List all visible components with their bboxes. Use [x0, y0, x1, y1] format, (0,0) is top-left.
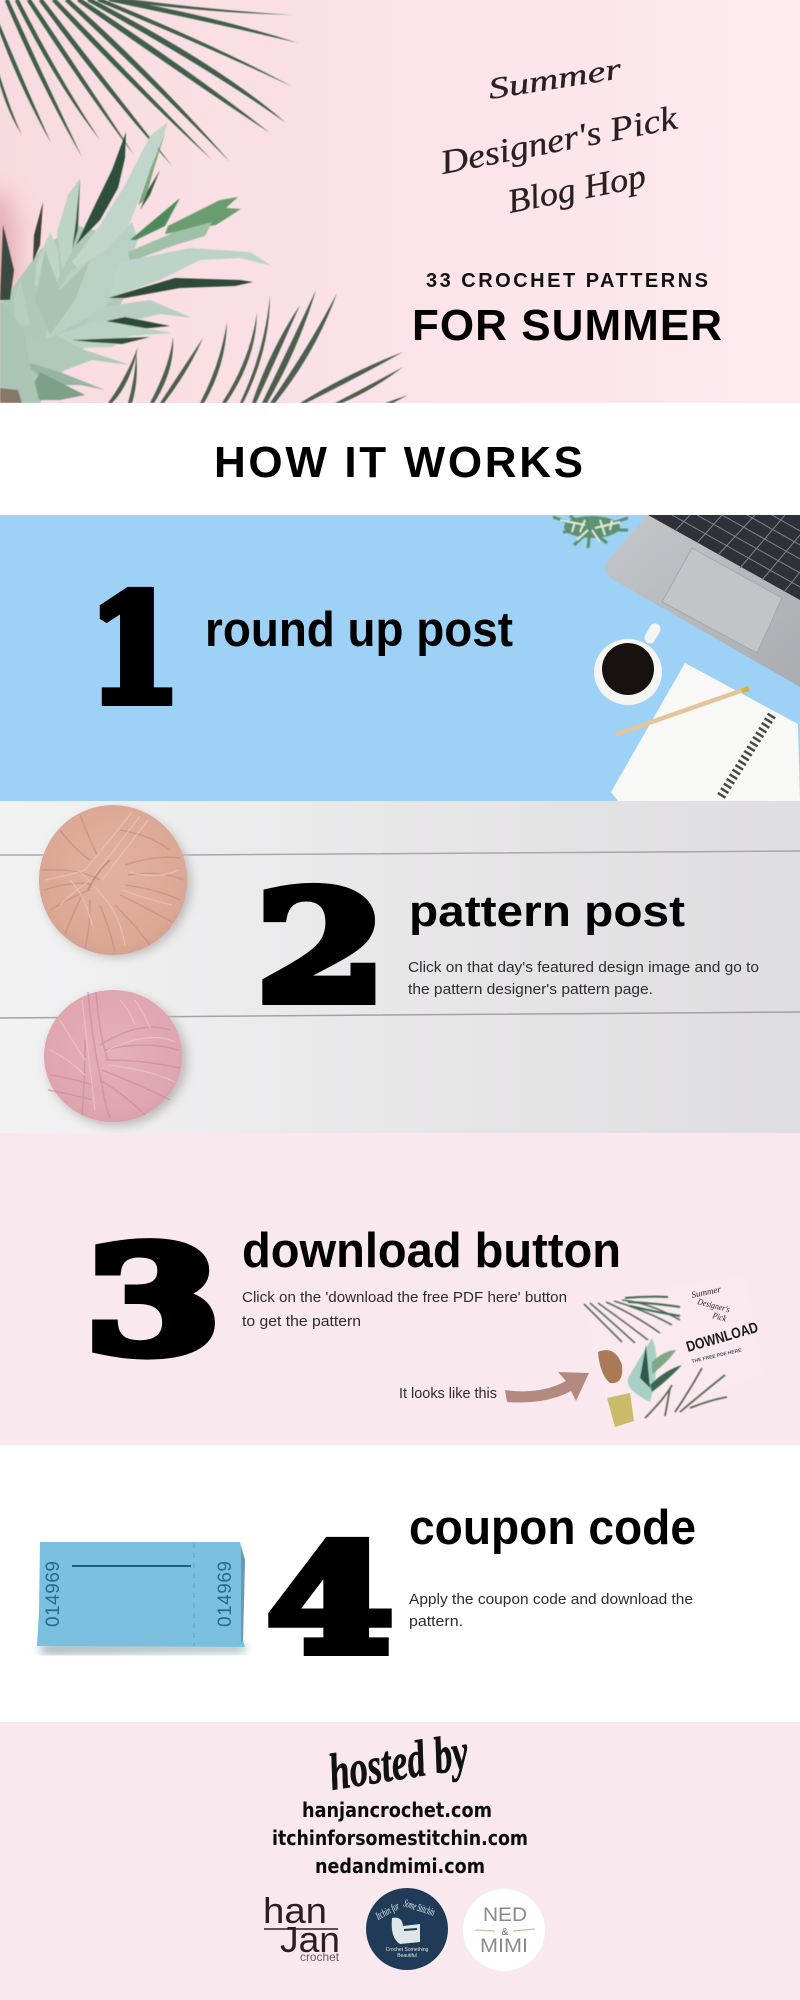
image: blue ticket: 014969 — [43, 1561, 64, 1627]
step title: round up post — [205, 603, 513, 657]
script title: Blog Hop — [504, 158, 649, 221]
image: download button thumbnail: DOWNLOAD — [684, 1319, 760, 1356]
panel: step 3 — [0, 1133, 800, 1445]
image: peach yarn ball — [39, 805, 191, 957]
step title: coupon code — [409, 1501, 696, 1555]
panel: footer hosted by — [0, 1722, 800, 2000]
step description: Apply the coupon code and download the — [409, 1591, 693, 1608]
heading: how it works: HOW IT WORKS — [214, 438, 583, 487]
logo: itchin for some stitchin: Some Stitchin — [402, 1897, 436, 1919]
image: download button thumbnail: Summer — [690, 1284, 722, 1300]
script title — [436, 52, 681, 221]
image: download button thumbnail: THE FREE PDF HERE — [691, 1347, 743, 1365]
script heading: hosted by — [325, 1724, 473, 1802]
step description: to get the pattern — [242, 1313, 361, 1330]
logo: itchin for some stitchin: Crochet Something — [386, 1947, 429, 1953]
host websites: nedandmimi.com — [315, 1854, 485, 1878]
panel: step 4 — [0, 1445, 800, 1722]
image: coffee cup — [594, 629, 662, 705]
image: laptop — [605, 515, 800, 687]
number 4: 4 — [267, 1513, 393, 1686]
image: download button thumbnail: Pick — [711, 1310, 728, 1324]
logo: han jan crochet: han — [263, 1890, 327, 1931]
logo: itchin for some stitchin — [366, 1888, 448, 1970]
image: blue ticket: 014969 — [215, 1561, 236, 1627]
panel: hero header — [0, 0, 800, 403]
image: plant — [553, 516, 628, 548]
logo: ned and mimi: MIMI — [480, 1936, 528, 1957]
step description: the pattern designer's pattern page. — [408, 981, 653, 998]
host websites: itchinforsomestitchin.com — [272, 1826, 528, 1850]
heading: FOR SUMMER — [412, 301, 722, 350]
number 3: 3 — [86, 1216, 220, 1387]
logo: han jan crochet: crochet — [300, 1950, 340, 1964]
logo: ned and mimi — [463, 1889, 545, 1971]
image: palm frond top left — [0, 0, 298, 167]
logo: itchin for some stitchin: Beautiful — [397, 1953, 417, 1959]
step description — [242, 1289, 567, 1330]
step description — [408, 959, 759, 998]
panel: step 1 — [0, 515, 800, 801]
host websites: hanjancrochet.com — [302, 1798, 492, 1822]
number 2: 2 — [256, 858, 386, 1036]
logo: han jan crochet — [263, 1890, 340, 1964]
image: pineapple crown — [0, 122, 272, 403]
step description — [409, 1591, 693, 1630]
step title: pattern post — [409, 887, 685, 936]
arrow — [505, 1372, 589, 1403]
step title: download button — [242, 1224, 621, 1278]
image: download button thumbnail — [583, 1275, 763, 1427]
image: notebook and pencil — [611, 663, 800, 801]
panel: step 2 — [0, 801, 800, 1133]
subheading: 33 CROCHET PATTERNS — [426, 270, 708, 292]
step description: Click on the 'download the free PDF here' button — [242, 1289, 567, 1306]
image: palm leaves bottom — [108, 290, 408, 403]
step description: pattern. — [409, 1613, 463, 1630]
logo: itchin for some stitchin: Itchin for — [373, 1900, 402, 1923]
script title: Summer — [486, 52, 624, 106]
image: blue ticket — [37, 1542, 246, 1653]
logo: han jan crochet: Jan — [280, 1919, 340, 1960]
logo: ned and mimi: & — [502, 1927, 509, 1938]
logo: ned and mimi: NED — [483, 1905, 527, 1926]
host websites — [272, 1798, 528, 1878]
number 1: 1 — [88, 563, 181, 736]
script title: Designer's Pick — [436, 100, 681, 182]
step description: Click on that day's featured design image and go to — [408, 959, 759, 976]
image: download button thumbnail: Designer's — [696, 1296, 731, 1315]
caption: It looks like this — [399, 1385, 497, 1402]
image: pink yarn ball — [44, 990, 187, 1126]
shadow on pink wall — [0, 190, 18, 310]
